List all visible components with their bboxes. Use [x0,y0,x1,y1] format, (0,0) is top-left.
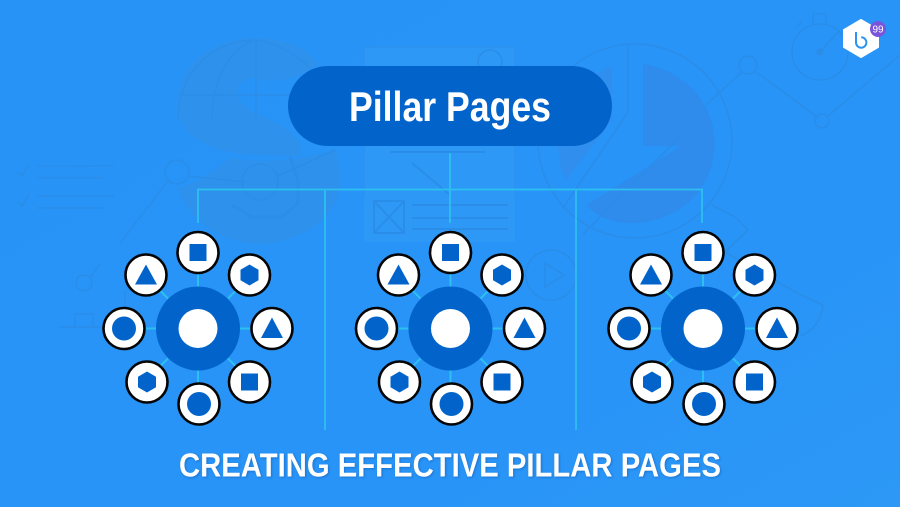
title pill: Pillar Pages [288,66,612,146]
caption: CREATING EFFECTIVE PILLAR PAGES [179,446,721,484]
watermark: gear [178,150,340,244]
watermark: stopwatch [792,14,848,80]
logo letter b [856,32,866,48]
background watermark icons [17,14,900,336]
cluster: middle [356,232,545,424]
badge number: 99 [872,24,884,36]
cluster: left [104,232,292,424]
watermark: line graph right [706,55,900,336]
badge circle [870,21,886,37]
watermark: pie chart [538,44,732,238]
logo badge [844,20,886,57]
watermark: line graph left [59,150,335,327]
watermark: globe [178,38,318,156]
cluster: right [608,232,798,424]
watermark: play button [526,250,576,300]
watermark: document [364,47,515,242]
pill label: Pillar Pages [349,83,551,130]
watermark: checklist [17,164,114,208]
connector lines [198,153,702,430]
